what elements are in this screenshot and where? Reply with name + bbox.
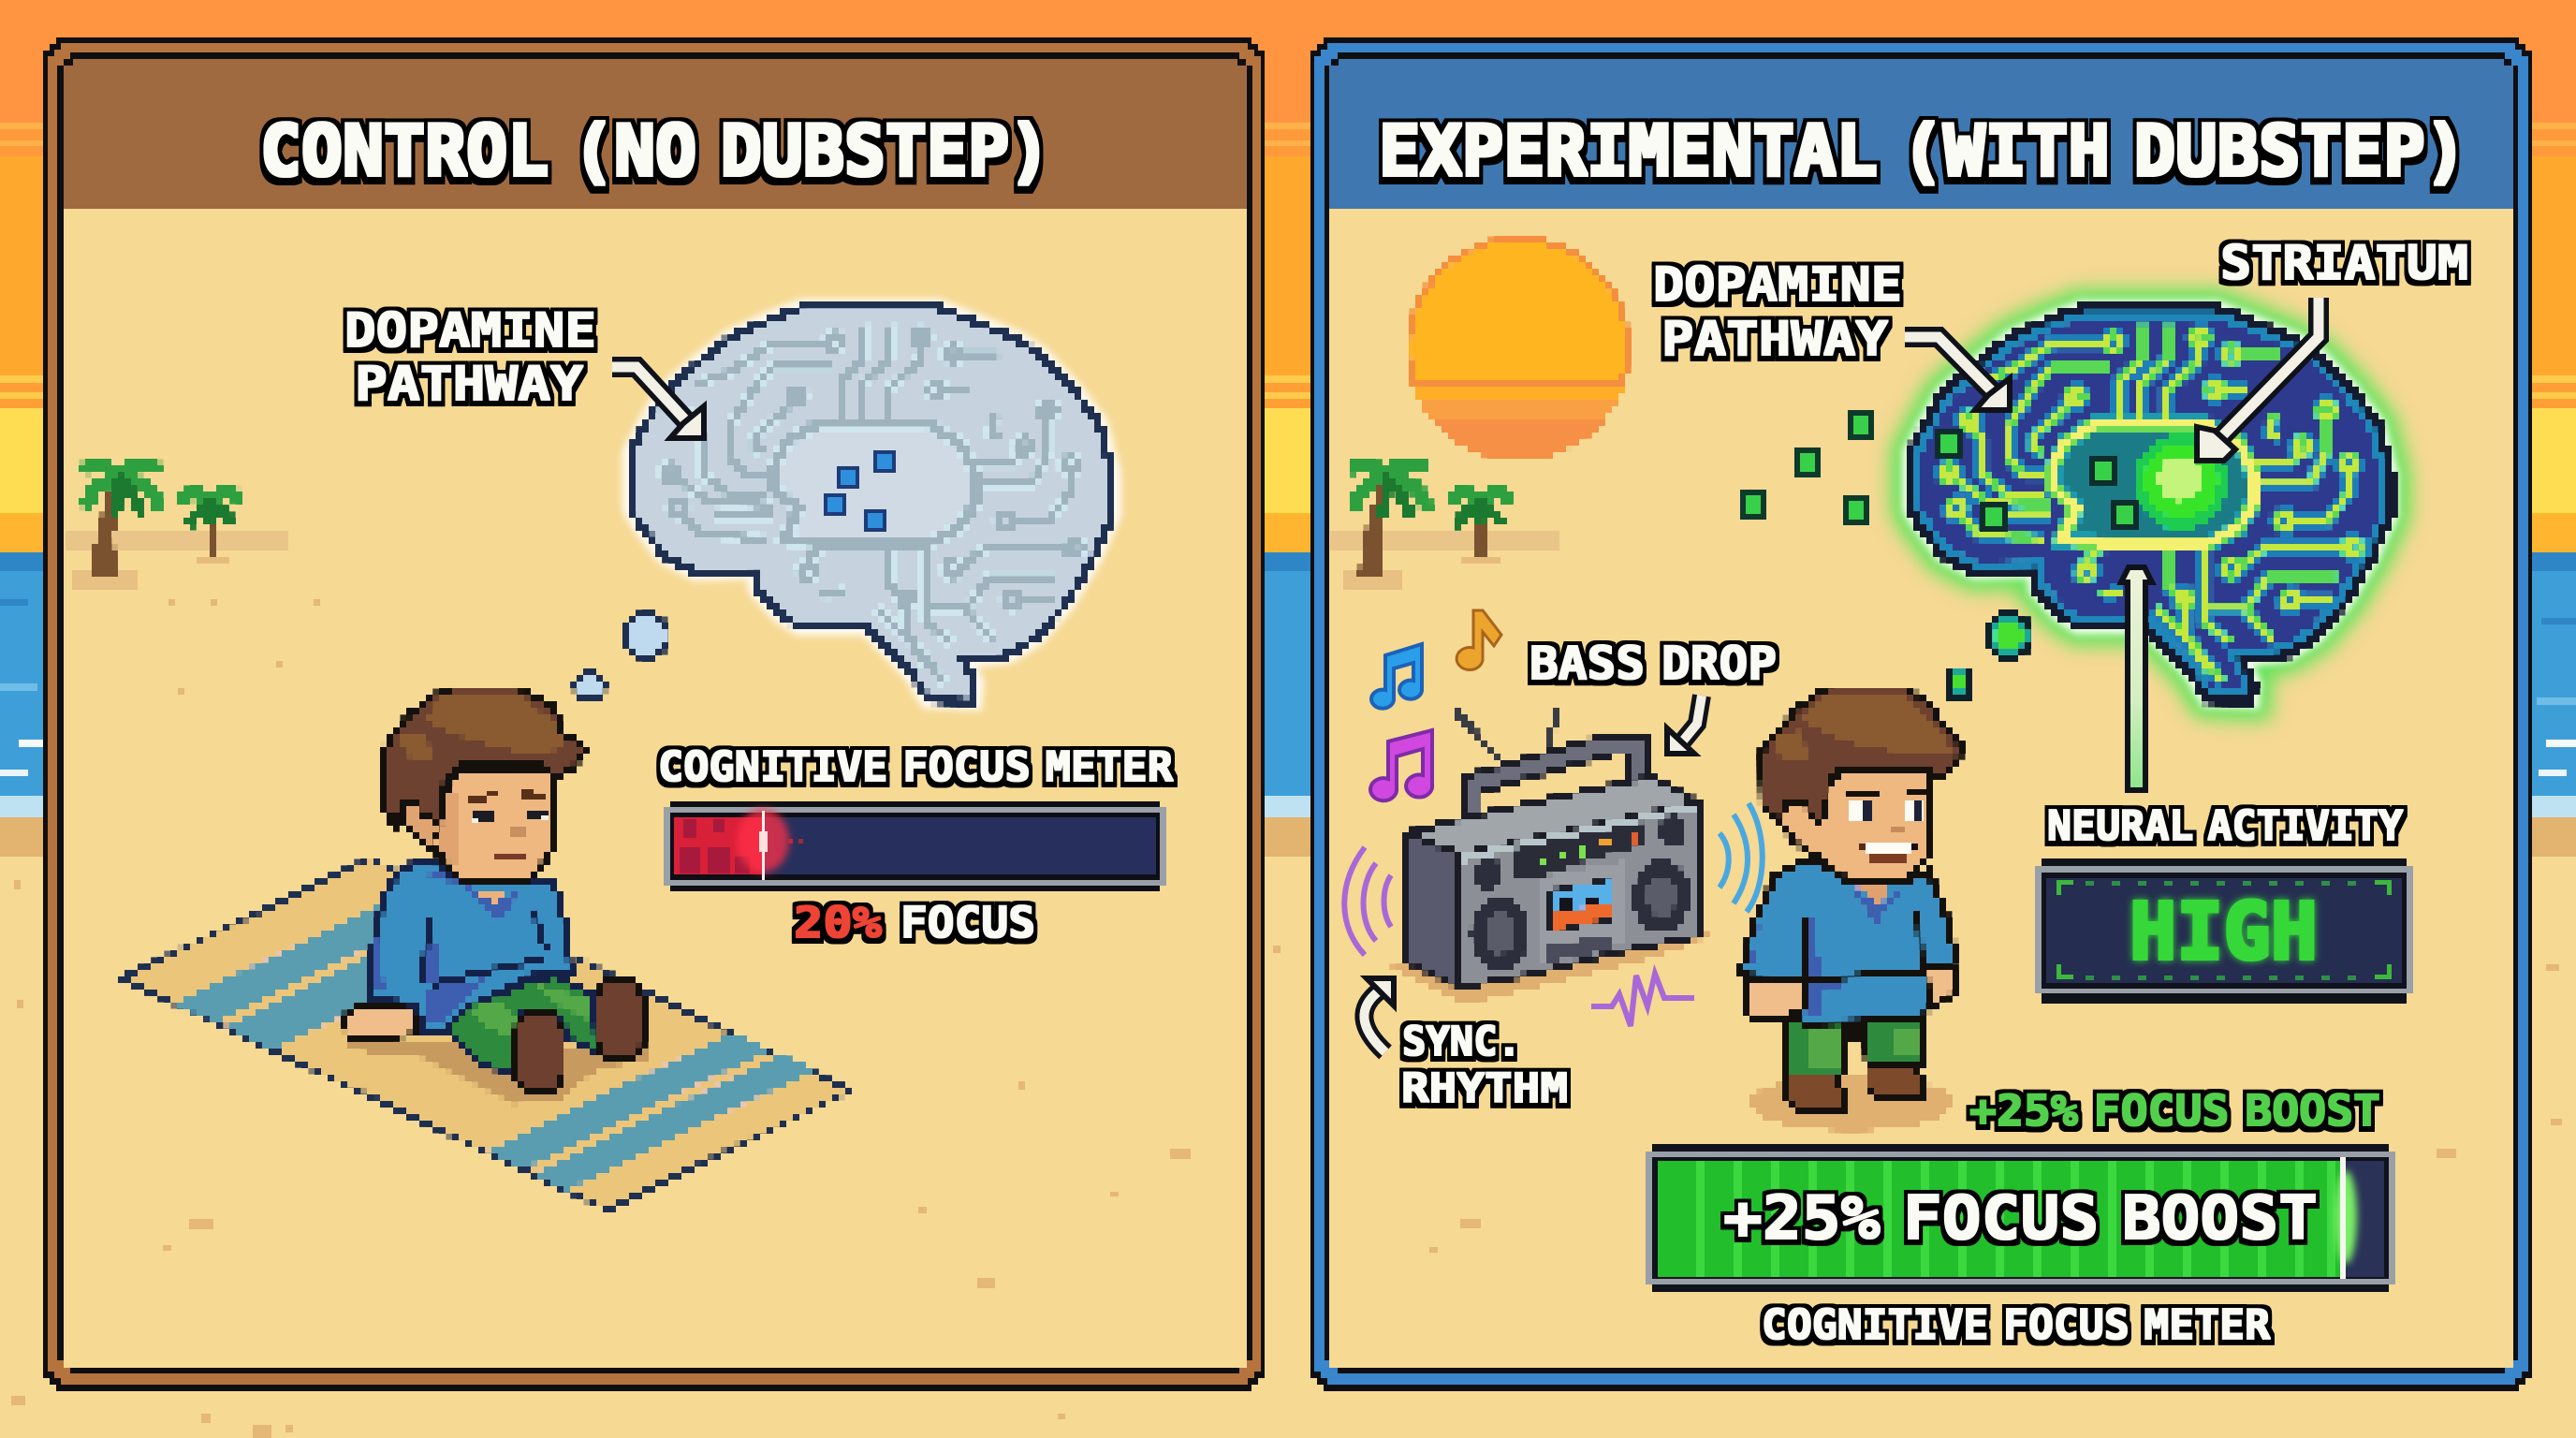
label: sync rhythm: SYNC. xyxy=(1402,1019,1521,1065)
meter value: 20% focus: 20% xyxy=(794,898,882,947)
callout: +25% focus boost: +25% FOCUS BOOST xyxy=(1969,1086,2380,1136)
beach towel xyxy=(122,858,850,1210)
title: control: CONTROL (NO DUBSTEP) xyxy=(260,110,1050,192)
meter value: 20% focus xyxy=(794,898,1035,947)
dopamine dots: inside brain xyxy=(1938,432,2136,529)
icon: purple music note xyxy=(1370,730,1432,800)
label: dopamine pathway, experimental: DOPAMINE xyxy=(1653,257,1902,312)
neural activity readout: high xyxy=(2035,858,2413,1004)
label: dopamine pathway, experimental xyxy=(1653,257,1902,366)
icon: setting sun xyxy=(1404,234,1633,466)
label: striatum: STRIATUM xyxy=(2220,236,2468,290)
title: experimental: EXPERIMENTAL (WITH DUBSTEP) xyxy=(1379,110,2466,192)
sound waves: purple, left of boombox xyxy=(1344,847,1391,955)
focus meter: boosted xyxy=(1646,1144,2395,1292)
thought bubbles: experimental xyxy=(1947,613,2031,696)
neural activity readout: high: HIGH xyxy=(2130,886,2318,977)
panel header: experimental xyxy=(1329,59,2513,209)
panel: control (no dubstep) xyxy=(43,37,1265,1391)
palm trees: experimental panel xyxy=(1333,463,1559,587)
panel header: control xyxy=(64,59,1247,209)
sand speckles inside the panels xyxy=(163,599,2456,1288)
icon: orange music note xyxy=(1456,610,1501,670)
arrow: dopamine pathway, control xyxy=(612,367,704,438)
dopamine dots: floating toward brain xyxy=(1743,413,1871,522)
brain: experimental, glowing with green pathways xyxy=(1910,307,2391,702)
focus meter: 20 percent xyxy=(664,801,1166,891)
sound waves: blue, right of boombox xyxy=(1720,803,1763,912)
label: dopamine pathway, experimental: PATHWAY xyxy=(1661,312,1888,366)
label: dopamine pathway, control: DOPAMINE xyxy=(344,303,596,358)
meter label: experimental: COGNITIVE FOCUS METER xyxy=(1762,1301,2271,1349)
dopamine dots: few and dim xyxy=(826,452,894,530)
arrow: dopamine pathway, experimental xyxy=(1905,337,2010,410)
arrow: striatum xyxy=(2197,298,2319,461)
icon: blue music note xyxy=(1371,644,1422,709)
label: dopamine pathway, control xyxy=(344,303,596,411)
arrow: sync rhythm xyxy=(1364,978,1394,1052)
panel: experimental (with dubstep) xyxy=(1310,37,2532,1391)
label: sync rhythm xyxy=(1401,1019,1568,1112)
face: wide eyes and big smile xyxy=(1846,789,1928,863)
palm trees: control panel xyxy=(65,463,291,587)
thought bubbles: control xyxy=(576,614,668,700)
label: neural activity: NEURAL ACTIVITY xyxy=(2047,802,2403,850)
label: dopamine pathway, control: PATHWAY xyxy=(355,357,583,411)
waveform: purple xyxy=(1591,974,1694,1026)
meter text: +25% focus boost: +25% FOCUS BOOST xyxy=(1723,1184,2318,1254)
character: bored person sitting on towel xyxy=(344,688,643,1093)
face: tired eyes, flat mouth xyxy=(468,789,549,859)
meter value: 20% focus: FOCUS xyxy=(900,898,1035,947)
brain: control, dim with grey pathways xyxy=(631,307,1112,702)
arrow: bass drop xyxy=(1667,696,1702,754)
label: sync rhythm: RHYTHM xyxy=(1401,1065,1568,1112)
arrow: neural activity to brain xyxy=(2121,567,2152,790)
meter label: control: COGNITIVE FOCUS METER xyxy=(658,743,1174,791)
icon: boombox xyxy=(1392,705,1711,1005)
character: happy person standing xyxy=(1739,688,1964,1131)
sand speckles outside the panels xyxy=(11,880,2562,1438)
label: bass drop: BASS DROP xyxy=(1530,638,1777,690)
